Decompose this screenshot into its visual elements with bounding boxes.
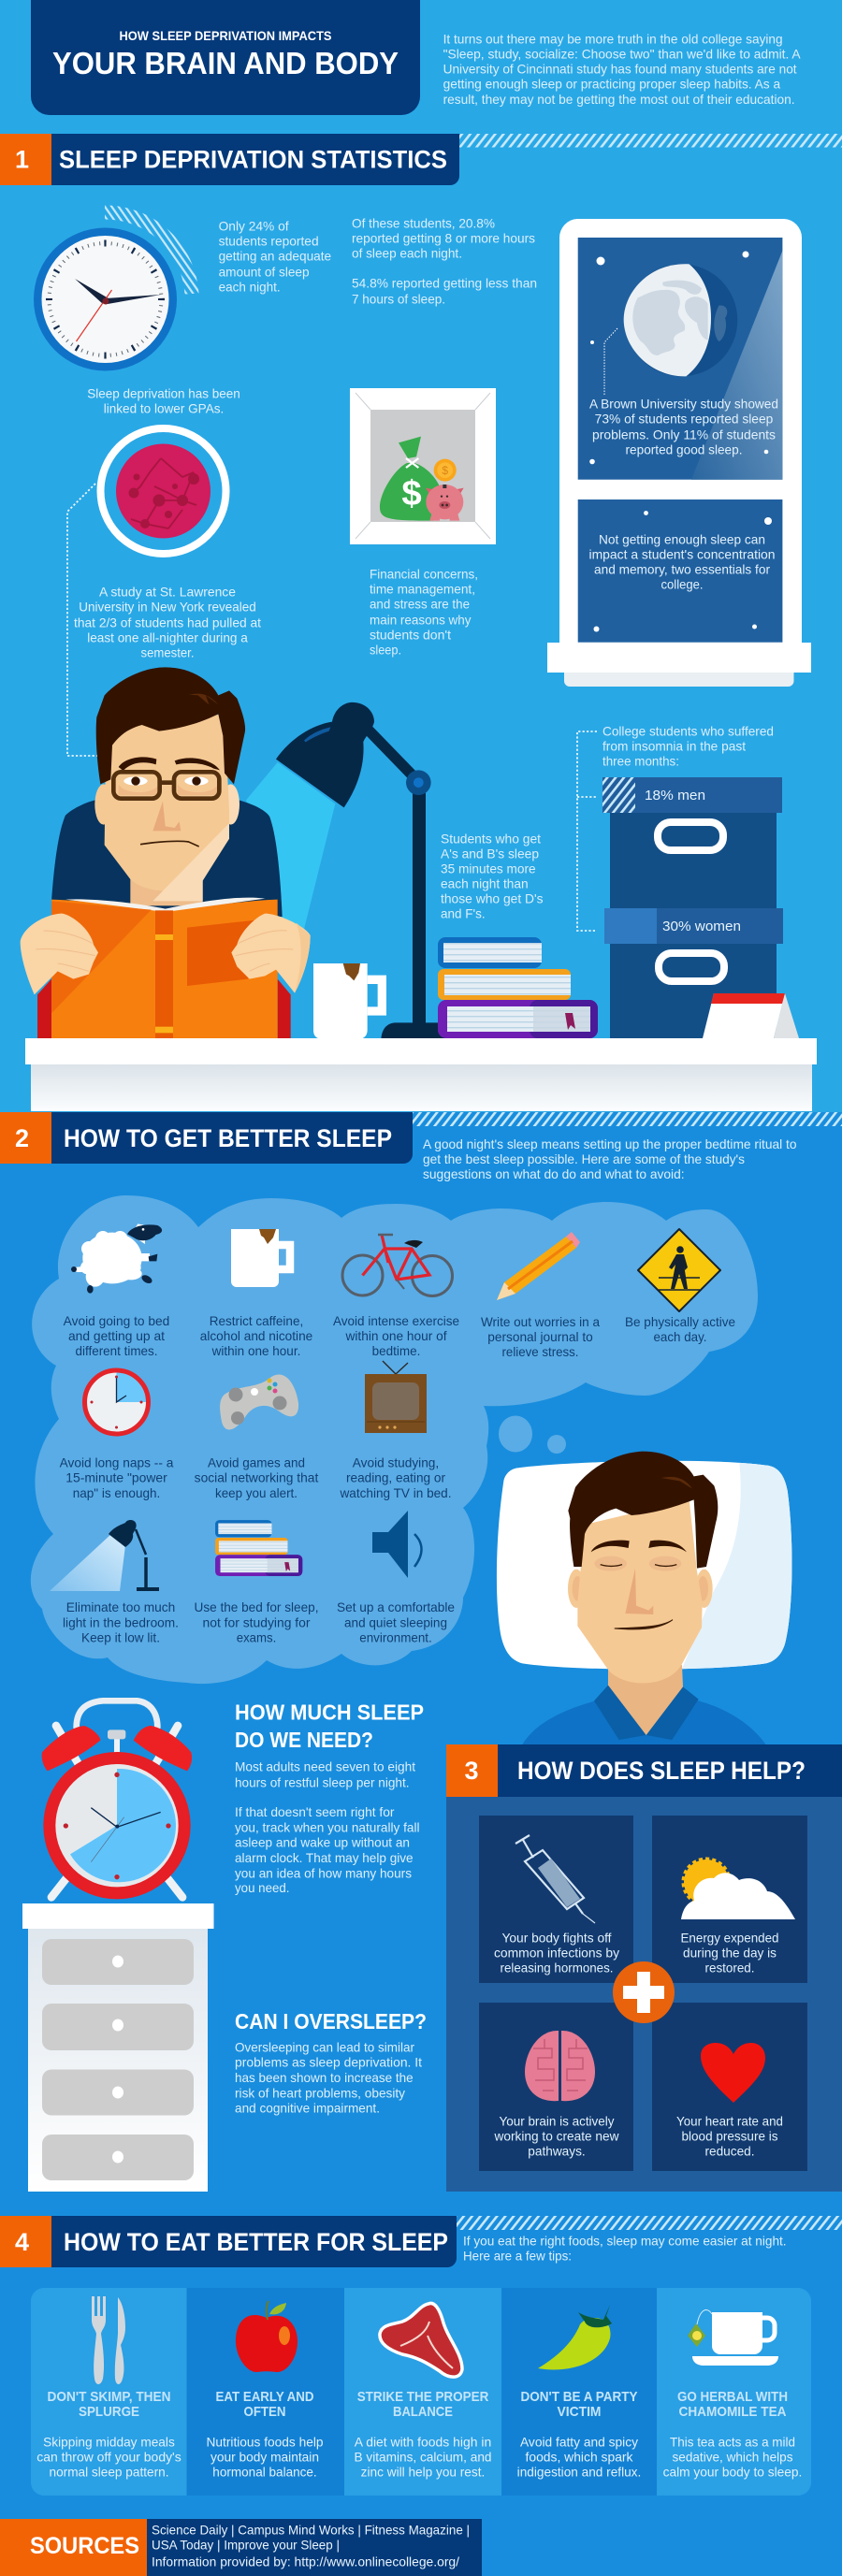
tip: game controller icon	[220, 1375, 298, 1429]
tile: infections: Your body fights off	[501, 1932, 612, 1946]
intro text: "Sleep, study, socialize: Choose two" than we'd like to admit. A	[443, 47, 802, 61]
intro text: getting enough sleep or practicing proper sleep habits. As a	[443, 78, 781, 92]
tip: skip meals	[36, 2296, 181, 2480]
tip text row 1: Be physically active	[625, 1315, 735, 1329]
tip text row 1: Write out worries in a	[481, 1315, 600, 1329]
tile: heart: reduced.	[705, 2145, 754, 2159]
text: grades and sleep: A's and B's sleep	[441, 847, 539, 861]
open book	[37, 898, 291, 1039]
text: eat right	[463, 2235, 787, 2264]
text: grades and sleep: each night than	[441, 877, 529, 891]
tip: small lamp icon	[50, 1520, 159, 1591]
text block: can I oversleep: has been shown to increase the	[235, 2071, 414, 2085]
tip: eat early	[206, 2301, 324, 2480]
tip text row 3: Keep it low lit.	[81, 1631, 160, 1645]
coffee mug	[313, 963, 382, 1039]
text block: how much sleep: you an idea of how many hours	[235, 1867, 412, 1881]
text: all-nighter study: A study at St. Lawrence	[99, 586, 236, 600]
icon: desk calendar	[703, 993, 799, 1038]
icon: fork and knife	[92, 2296, 125, 2384]
sources: USA Today | Improve your Sleep |	[152, 2539, 340, 2553]
tip: party: Avoid fatty and spicy	[520, 2436, 638, 2450]
tile: infections: releasing hormones.	[500, 1961, 614, 1975]
stat: hours of sleep: 54.8% reported getting less than	[352, 277, 537, 291]
title banner: YOUR BRAIN AND BODY	[52, 47, 399, 81]
stat: hours of sleep: reported getting 8 or more hours	[352, 232, 535, 246]
text: grades and sleep: and F's.	[441, 907, 486, 921]
tip text row 2: nap" is enough.	[73, 1486, 160, 1500]
text: grades and sleep: 35 minutes more	[441, 862, 536, 876]
tip text row 2	[60, 1456, 451, 1500]
stars	[589, 251, 772, 632]
text block: can I oversleep: Oversleeping can lead to similar	[235, 2041, 414, 2055]
text: concentration: impact a student's concentration	[589, 548, 775, 562]
text: all-nighter study: University in New York revealed	[79, 601, 256, 615]
icon: wall clock	[34, 212, 192, 370]
tip text row 3: Use the bed for sleep,	[195, 1600, 318, 1614]
text block: can I oversleep: problems as sleep deprivation. It	[235, 2056, 422, 2070]
tip text row 1: personal journal to	[487, 1330, 593, 1344]
icon: framed money bag and piggy bank: $	[442, 464, 448, 477]
text block: can I oversleep: CAN I OVERSLEEP?	[235, 2009, 427, 2033]
text: concentration: and memory, two essentials for	[594, 563, 770, 577]
text: concentration	[589, 533, 775, 592]
text: insomnia: three months:	[602, 755, 679, 769]
tip text row 1: Restrict caffeine,	[210, 1314, 303, 1328]
text: eat right: Here are a few tips:	[463, 2250, 572, 2264]
icon: syringe	[515, 1835, 595, 1923]
tip text row 2: social networking that	[195, 1471, 319, 1485]
tip: balance: A diet with foods high in	[355, 2436, 491, 2450]
tip: chamomile: GO HERBAL WITH	[677, 2389, 788, 2405]
tip: eat early: your body maintain	[210, 2451, 319, 2465]
tile: infections	[479, 1816, 633, 1983]
tile: brain: working to create new	[493, 2130, 619, 2144]
icon: brain	[525, 2031, 595, 2101]
tip text row 1: Avoid going to bed	[64, 1314, 169, 1328]
intro text: University of Cincinnati study has found many students are not	[443, 63, 797, 77]
desk	[25, 1038, 817, 1111]
tile: heart: blood pressure is	[681, 2130, 778, 2144]
tip text row 2: 15-minute "power	[65, 1471, 167, 1485]
section 1 header: 1	[15, 146, 29, 174]
tip: skip meals: SPLURGE	[79, 2404, 139, 2420]
tip text row 1: different times.	[75, 1344, 157, 1358]
desk lamp	[276, 702, 452, 1039]
text: grades and sleep: Students who get	[441, 832, 541, 847]
head	[94, 667, 245, 905]
icon: steak	[380, 2303, 462, 2377]
text block: how much sleep: you, track when you naturally fall	[235, 1821, 419, 1835]
tile: energy: Energy expended	[681, 1932, 778, 1946]
thought cloud	[31, 1195, 758, 1684]
tile: heart: Your heart rate and	[676, 2115, 783, 2129]
tile: heart	[652, 2003, 807, 2171]
tip: eat early: Nutritious foods help	[206, 2436, 324, 2450]
tip: eat early: EAT EARLY AND	[215, 2389, 314, 2405]
stat: 24 percent: getting an adequate	[219, 250, 331, 264]
section 2 header: HOW TO GET BETTER SLEEP	[64, 1124, 392, 1152]
tip text row 2: Avoid studying,	[353, 1456, 439, 1470]
tip: party	[517, 2305, 641, 2480]
icon: moon	[624, 264, 737, 376]
thought bubbles	[499, 1416, 566, 1454]
icon: chili pepper	[538, 2305, 612, 2369]
window sill	[547, 643, 811, 687]
tip: chamomile: calm your body to sleep.	[663, 2466, 802, 2480]
tip text row 1: alcohol and nicotine	[200, 1329, 312, 1343]
text: Brown University	[589, 398, 778, 457]
stat: 24 percent: students reported	[219, 235, 319, 249]
text: lower GPAs: Sleep deprivation has been	[87, 386, 240, 400]
tip: pencil icon	[497, 1232, 580, 1300]
tip text row 3: exams.	[237, 1631, 276, 1645]
tip: chamomile: CHAMOMILE TEA	[679, 2404, 787, 2420]
text: insomnia	[602, 725, 774, 769]
tip text row 3: and quiet sleeping	[344, 1616, 447, 1630]
shirt	[522, 1700, 765, 1744]
text block: how much sleep: asleep and wake up without an	[235, 1836, 410, 1850]
illustration: sleeping man on pillow	[494, 1452, 798, 1744]
nightstand	[22, 1903, 213, 2192]
tip: skip meals: DON'T SKIMP, THEN	[47, 2389, 170, 2405]
tile: energy: restored.	[705, 1961, 754, 1975]
text: Brown University: reported good sleep.	[625, 443, 743, 457]
text: financial concerns: main reasons why	[370, 613, 472, 627]
text: grades and sleep: those who get D's	[441, 892, 544, 906]
text: financial concerns: time management,	[370, 583, 475, 597]
text: financial concerns: students don't	[370, 629, 451, 643]
title banner	[31, 0, 420, 115]
text: bedtime ritual: A good night's sleep means setting up the proper bedtime ritual to	[423, 1137, 797, 1151]
text: financial concerns	[370, 567, 478, 658]
tip text row 3: Set up a comfortable	[337, 1600, 455, 1614]
section 4 header: 4	[15, 2228, 29, 2256]
icon: sun behind cloud	[681, 1860, 795, 1919]
tip: small books icon	[215, 1520, 302, 1576]
text: concentration: college.	[661, 578, 704, 592]
tip: chamomile: This tea acts as a mild	[670, 2436, 795, 2450]
text block: how much sleep: alarm clock. That may help give	[235, 1851, 414, 1865]
bar: 30% women: 30% women	[662, 919, 741, 934]
window with moon panels	[547, 219, 811, 687]
tip: nap clock icon	[84, 1370, 148, 1434]
tip: pedestrian sign icon	[638, 1229, 720, 1311]
tip text row 1: each day.	[653, 1330, 707, 1344]
tip: sheep icon	[71, 1223, 162, 1294]
tile: infections: common infections by	[494, 1946, 619, 1961]
tile: energy: during the day is	[683, 1946, 777, 1961]
tip text row 2: Avoid games and	[208, 1456, 305, 1470]
section 2 header: 2	[15, 1124, 29, 1152]
panel: food tips	[31, 2288, 811, 2496]
alarm clock	[42, 1700, 192, 1899]
tip text row 3: environment.	[359, 1631, 432, 1645]
intro text: It turns out there may be more truth in the old college saying	[443, 32, 783, 46]
tip text row 3: not for studying for	[202, 1616, 311, 1630]
tip: skip meals: normal sleep pattern.	[49, 2466, 168, 2480]
stat: hours of sleep	[352, 216, 537, 307]
section 2 header	[0, 1112, 842, 1164]
icon: heart	[701, 2043, 765, 2103]
tip: party: foods, which spark	[526, 2451, 633, 2465]
text: eat right: If you eat the right foods, sleep may come easier at night.	[463, 2235, 787, 2249]
icon: tea cup	[688, 2310, 778, 2366]
text block: can I oversleep: and cognitive impairment.	[235, 2102, 380, 2116]
text block: how much sleep: you need.	[235, 1881, 290, 1895]
tip: balance	[354, 2303, 492, 2480]
icon: framed money bag and piggy bank: $	[401, 473, 422, 514]
tip: eat early: OFTEN	[243, 2404, 286, 2420]
icon: magnified neurons	[101, 428, 226, 554]
text block: how much sleep: hours of restful sleep per night.	[235, 1776, 410, 1790]
section 3 header: HOW DOES SLEEP HELP?	[517, 1757, 806, 1785]
text: all-nighter study: semester.	[140, 646, 195, 660]
tip: party: VICTIM	[558, 2404, 601, 2420]
section 4 header: HOW TO EAT BETTER FOR SLEEP	[64, 2228, 448, 2256]
sources: Science Daily | Campus Mind Works | Fitness Magazine |	[152, 2524, 470, 2538]
stat: hours of sleep: Of these students, 20.8%	[352, 216, 495, 230]
text block: how much sleep	[235, 1700, 424, 1895]
tile: brain: Your brain is actively	[500, 2115, 615, 2129]
sources: Information provided by: http://www.onlinecollege.org/	[152, 2555, 459, 2569]
text block: how much sleep: Most adults need seven to eight	[235, 1760, 415, 1774]
section 1 header: SLEEP DEPRIVATION STATISTICS	[59, 146, 447, 174]
text: all-nighter study: least one all-nighter during a	[87, 631, 248, 645]
text: grades and sleep	[441, 832, 544, 921]
text: all-nighter study: that 2/3 of students had pulled at	[74, 616, 261, 630]
tip text row 1: bedtime.	[372, 1344, 420, 1358]
storage box chart: insomnia percentages	[602, 777, 783, 1038]
tile: energy	[652, 1816, 807, 1983]
icon: apple	[236, 2301, 298, 2372]
text block: can I oversleep: risk of heart problems, obesity	[235, 2087, 405, 2101]
shoulders	[51, 800, 283, 917]
text: financial concerns: and stress are the	[370, 598, 470, 612]
tip: bicycle icon	[342, 1235, 453, 1296]
drawers	[42, 1939, 194, 2180]
text: insomnia: from insomnia in the past	[602, 740, 746, 754]
tip: party: DON'T BE A PARTY	[520, 2389, 638, 2405]
text: financial concerns: sleep.	[370, 644, 401, 658]
tip: balance: B vitamins, calcium, and	[354, 2451, 492, 2465]
dotted bracket	[577, 731, 597, 931]
tip text row 1	[64, 1314, 735, 1359]
icon: plus badge	[613, 1961, 675, 2023]
tip text row 3	[63, 1600, 455, 1645]
bar: 18% men: 18% men	[645, 788, 705, 803]
tip text row 1: within one hour of	[344, 1329, 447, 1343]
lamp light cone	[246, 762, 335, 929]
text: bedtime ritual: get the best sleep possible. Here are some of the study's	[423, 1152, 745, 1166]
section 3 header	[446, 1744, 842, 1797]
tip text row 2: watching TV in bed.	[340, 1486, 451, 1500]
stat: hours of sleep: 7 hours of sleep.	[352, 293, 445, 307]
section 4 header	[0, 2216, 842, 2267]
section 3 header: 3	[464, 1757, 479, 1785]
head	[568, 1570, 585, 1608]
dotted pointer	[604, 328, 617, 396]
bar: 30% women	[604, 908, 783, 944]
tip: party: indigestion and reflux.	[517, 2466, 641, 2480]
text block: how much sleep: If that doesn't seem right for	[235, 1805, 395, 1819]
tip: skip meals: can throw off your body's	[36, 2451, 181, 2465]
icon: framed money bag and piggy bank	[350, 388, 496, 544]
stat: hours of sleep: of sleep each night.	[352, 247, 462, 261]
stat: 24 percent	[219, 219, 331, 295]
intro text: result, they may not be getting the most out of their education.	[443, 93, 795, 107]
intro text	[443, 32, 802, 107]
tile: brain: pathways.	[528, 2145, 586, 2159]
text: lower GPAs	[87, 386, 240, 415]
pillow	[494, 1456, 798, 1674]
text: bedtime ritual: suggestions on what do do and what to avoid:	[423, 1167, 685, 1181]
bar: 18% men	[602, 777, 782, 813]
sources	[0, 2519, 482, 2576]
tip text row 1: and getting up at	[68, 1329, 165, 1343]
tip: balance: STRIKE THE PROPER	[357, 2389, 488, 2405]
text: Brown University: problems. Only 11% of students	[592, 428, 776, 442]
tip text row 2: Avoid long naps -- a	[60, 1456, 174, 1470]
tip: mug icon	[231, 1229, 290, 1287]
tip text row 1: Avoid intense exercise	[333, 1314, 459, 1328]
tip text row 2: keep you alert.	[215, 1486, 298, 1500]
text: bedtime ritual	[423, 1137, 797, 1181]
icon: stack of books	[438, 937, 598, 1038]
hands	[21, 914, 311, 994]
text: financial concerns: Financial concerns,	[370, 567, 478, 581]
tip: skip meals: Skipping midday meals	[43, 2436, 175, 2450]
tip: chamomile: sedative, which helps	[672, 2451, 793, 2465]
tip text row 2: reading, eating or	[346, 1471, 445, 1485]
tip text row 1: relieve stress.	[501, 1345, 578, 1359]
illustration: student reading with lamp	[21, 667, 452, 1039]
tile: brain	[479, 2003, 633, 2171]
text: Brown University: 73% of students reported sleep	[595, 412, 773, 427]
tip: balance: zinc will help you rest.	[361, 2466, 485, 2480]
dotted connector: neurons to man	[67, 484, 97, 756]
tip: balance: BALANCE	[393, 2404, 453, 2420]
tip: chamomile	[663, 2310, 802, 2480]
text block: can I oversleep	[235, 2009, 427, 2116]
text: lower GPAs: linked to lower GPAs.	[104, 401, 224, 415]
section 1 header	[0, 134, 842, 185]
sources: SOURCES	[30, 2533, 139, 2559]
text: all-nighter study	[74, 586, 261, 660]
tip text row 3: light in the bedroom.	[63, 1616, 179, 1630]
stat: 24 percent: amount of sleep	[219, 266, 310, 280]
text block: how much sleep: DO WE NEED?	[235, 1728, 373, 1752]
tip text row 3: Eliminate too much	[66, 1600, 175, 1614]
text: Brown University: A Brown University study showed	[589, 398, 778, 412]
tip: eat early: hormonal balance.	[212, 2466, 317, 2480]
tip: speaker icon	[372, 1511, 421, 1578]
panel: how does sleep help	[446, 1744, 842, 2192]
tip: television icon	[365, 1361, 427, 1433]
text block: how much sleep: HOW MUCH SLEEP	[235, 1700, 424, 1725]
text: concentration: Not getting enough sleep can	[599, 533, 765, 547]
stat: 24 percent: each night.	[219, 281, 281, 295]
tip text row 1: within one hour.	[211, 1344, 300, 1358]
title banner: HOW SLEEP DEPRIVATION IMPACTS	[120, 28, 331, 43]
stat: 24 percent: Only 24% of	[219, 219, 289, 233]
text: insomnia: College students who suffered	[602, 725, 774, 739]
